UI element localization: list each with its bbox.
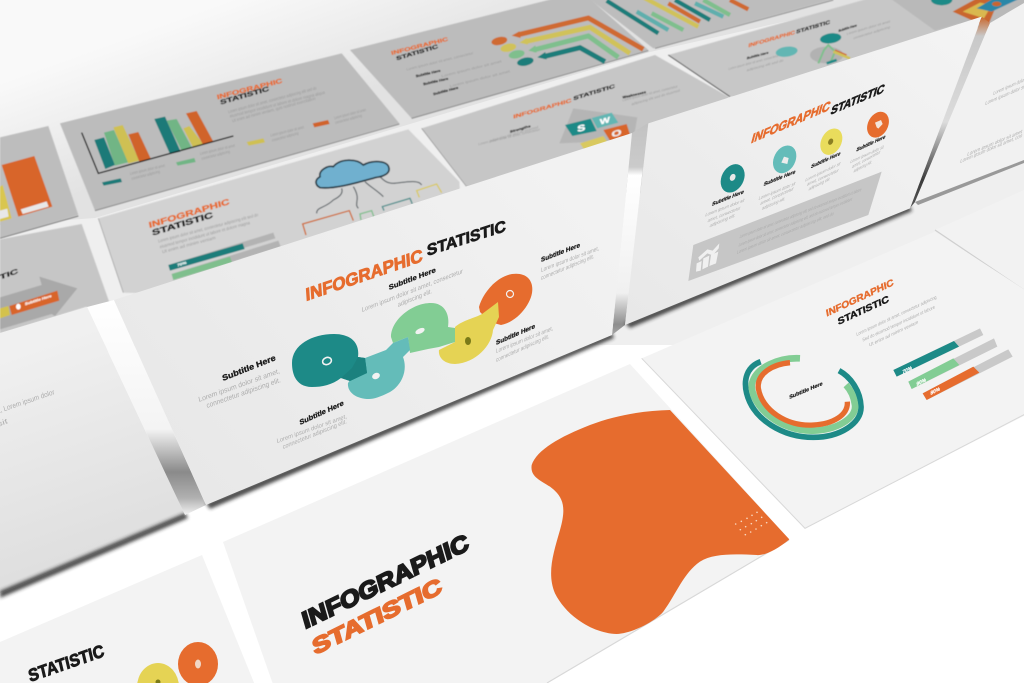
heading: STATISTIC bbox=[573, 83, 616, 103]
bent arrows bbox=[518, 18, 643, 62]
label: bottom: connectetur adipiscing elit. bbox=[282, 418, 347, 451]
icon circles bbox=[775, 32, 842, 58]
panel: arrow slide bbox=[0, 224, 125, 352]
label: left bbox=[198, 354, 281, 410]
column text bbox=[705, 144, 885, 229]
legend: Lorem ipsum dolor sit amet bbox=[130, 163, 166, 176]
heading bbox=[391, 37, 449, 62]
panel: far right flat slide bbox=[935, 190, 1024, 290]
text block: Lorem ipsum dolor sit bbox=[985, 83, 1024, 107]
subtitles: Lorem ipsum dolor sit amet, consectetur bbox=[406, 52, 474, 72]
labels: Weaknesses bbox=[622, 89, 647, 100]
heading bbox=[148, 196, 230, 238]
column text: amet, consectetur bbox=[806, 167, 840, 187]
blob: orange bbox=[479, 274, 532, 325]
icon: growth chart bbox=[696, 243, 719, 272]
column labels: Subtitle Here bbox=[855, 133, 887, 154]
label: bottom: Subtitle Here bbox=[299, 400, 345, 427]
column text: Lorem ipsum dolor sit bbox=[805, 160, 842, 183]
text block bbox=[856, 294, 937, 349]
heading bbox=[825, 276, 894, 327]
panel: cloud slide bbox=[98, 129, 467, 300]
heading bbox=[305, 216, 506, 306]
percent badges bbox=[491, 35, 534, 67]
heading: STATISTIC bbox=[829, 82, 887, 119]
gutter: left and centre bbox=[87, 300, 206, 515]
progress bar: 80%: 80% bbox=[930, 386, 941, 396]
yellow blob bbox=[137, 663, 179, 683]
text block: Ut enim ad minim veniam bbox=[162, 236, 216, 255]
heading: STATISTIC bbox=[796, 19, 831, 35]
swot matrix bbox=[559, 108, 637, 153]
labels bbox=[728, 19, 891, 72]
panel: bar chart slide: eiusmod tempor incididunt ut labore et dolore magna aliqua bbox=[229, 90, 326, 119]
column text: amet, consectetur bbox=[760, 185, 795, 206]
label: left: Subtitle Here bbox=[222, 354, 277, 383]
icon: leaf bbox=[156, 680, 160, 683]
column text: amet, consectetur bbox=[851, 148, 882, 169]
text block bbox=[228, 86, 326, 124]
text block: Sed do eiusmod tempor incididunt ut labore bbox=[862, 305, 935, 343]
column bars bbox=[607, 0, 748, 33]
heading: STATISTIC bbox=[220, 86, 271, 107]
panel: icons and growth slide bbox=[668, 0, 960, 107]
icon: teal circle bbox=[716, 160, 749, 197]
label: left: connectetur adipiscing elit. bbox=[206, 375, 281, 410]
orange blob bbox=[178, 642, 218, 683]
labels: adipiscing elit sed do eiusmod bbox=[490, 125, 539, 143]
heading: INFOGRAPHIC bbox=[748, 30, 796, 49]
subtitles: Subtitle Here bbox=[433, 85, 459, 96]
label: right top: Lorem ipsum dolor sit amet, bbox=[541, 245, 599, 274]
panel: donut slide bbox=[642, 232, 1024, 528]
column text: adipiscing elit. bbox=[808, 175, 831, 192]
labels: Lorem ipsum dolor sit amet bbox=[847, 19, 891, 36]
heading bbox=[299, 530, 472, 660]
blob: light teal bbox=[348, 337, 410, 399]
orange blob bbox=[531, 410, 789, 634]
legend: consectetur adipiscing bbox=[335, 113, 362, 125]
panel: cloud slide: Lorem ipsum dolor sit amet, consectetur adipiscing elit sed do bbox=[158, 212, 259, 244]
column labels bbox=[711, 133, 887, 208]
column text: Lorem ipsum dolor sit bbox=[705, 197, 746, 218]
shadow: right panel bbox=[625, 206, 912, 328]
yellow step bbox=[0, 306, 10, 318]
icons bbox=[322, 290, 514, 380]
heading: INFOGRAPHIC bbox=[391, 37, 449, 57]
label: top: Subtitle Here bbox=[388, 266, 437, 292]
shadow: centre panel bbox=[206, 333, 614, 509]
panel: cloud slide: eiusmod tempor incididunt ut labore et dolore magna bbox=[159, 220, 251, 250]
column text: Lorem ipsum dolor sit bbox=[758, 180, 797, 201]
heading bbox=[750, 82, 887, 147]
flow diagram bbox=[292, 274, 532, 399]
heading: INFOGRAPHIC bbox=[148, 196, 230, 230]
donut label: Subtitle Here bbox=[789, 380, 823, 400]
text block bbox=[960, 76, 1024, 165]
label: top: adipiscing elit. bbox=[398, 288, 432, 309]
subtitles: Lorem ipsum dolor sit amet bbox=[441, 60, 503, 79]
heading: STATISTIC bbox=[837, 293, 890, 327]
shadow: left panel bbox=[0, 513, 188, 598]
label: right top: Subtitle Here bbox=[541, 242, 580, 264]
text block: Lorem ipsum dolor bbox=[993, 76, 1024, 96]
panel: column chart slide bbox=[573, 0, 870, 48]
blob: dark teal bbox=[292, 334, 367, 387]
labels: Lorem ipsum dolor sit amet, consectetur bbox=[478, 128, 540, 147]
heading: INFOGRAPHIC bbox=[216, 78, 283, 101]
bar chart bbox=[82, 111, 233, 173]
panel: main slide right bbox=[625, 17, 982, 325]
labels: Lorem ipsum dolor sit amet, consectetur bbox=[728, 54, 779, 71]
swot matrix: W bbox=[600, 116, 612, 127]
icon: cloud bbox=[316, 160, 389, 188]
gutter: right and far right bbox=[910, 17, 990, 208]
label: right top: connectetur adipiscing elit. bbox=[541, 254, 594, 282]
heading bbox=[513, 83, 616, 121]
heading bbox=[216, 78, 283, 107]
swot matrix: O bbox=[611, 129, 623, 140]
label: bottom bbox=[276, 400, 347, 451]
panel: title slide bbox=[223, 364, 789, 683]
label: left: Lorem ipsum dolor sit amet, bbox=[198, 367, 280, 404]
panel: arrows slide bbox=[350, 0, 648, 118]
column text: amet, consectetur bbox=[707, 205, 742, 223]
label: top: Lorem ipsum dolor sit amet, consectetur bbox=[362, 267, 463, 313]
heading: INFOGRAPHIC bbox=[305, 246, 423, 306]
legend: consectetur adipiscing bbox=[272, 131, 299, 143]
gray band bbox=[688, 172, 882, 281]
column labels: Subtitle Here bbox=[763, 168, 797, 188]
heading: STATISTIC bbox=[396, 43, 440, 62]
labels bbox=[478, 84, 681, 147]
panel: far right slide bbox=[915, 3, 1024, 205]
progress bar: 90%: 90% bbox=[916, 377, 927, 387]
progress bars: 70% bbox=[177, 259, 188, 268]
column text: adipiscing elit. bbox=[709, 212, 736, 229]
card: orange bbox=[2, 156, 52, 217]
shadow: far right bbox=[915, 160, 1024, 205]
panel: swot slide bbox=[422, 55, 740, 203]
progress bar: 80% bbox=[923, 349, 1013, 400]
progress bars bbox=[168, 233, 281, 280]
heading: INFOGRAPHIC bbox=[513, 98, 572, 121]
heading bbox=[748, 19, 831, 49]
labels: Subtitle Here bbox=[838, 23, 858, 33]
column labels: Subtitle Here bbox=[810, 150, 842, 171]
icon: step badge bbox=[16, 304, 21, 310]
heading: STATISTIC bbox=[151, 209, 215, 238]
legend: consectetur adipiscing bbox=[131, 169, 160, 181]
label: top bbox=[362, 266, 463, 313]
subtitles: Lorem ipsum dolor sit amet bbox=[449, 70, 511, 89]
labels: consectetur adipiscing bbox=[853, 25, 890, 40]
labels: adipiscing elit sed do bbox=[747, 59, 784, 72]
blob: green bbox=[391, 303, 455, 353]
heading: STATISTIC bbox=[309, 573, 444, 660]
dot pattern bbox=[735, 512, 767, 535]
panel: bar chart slide: Ut enim ad minim veniam, quis nostrud exercitation bbox=[232, 96, 316, 124]
progress bar: 90% bbox=[908, 338, 997, 389]
swot matrix: S bbox=[577, 123, 585, 135]
panel: top right map slide bbox=[867, 0, 1024, 32]
progress bar: 70% bbox=[893, 328, 983, 377]
legend: Lorem ipsum dolor sit amet bbox=[270, 125, 305, 138]
legend bbox=[102, 108, 366, 186]
gray band: Lorem ipsum dolor sit amet, consectetur adipiscing elit, sed do bbox=[736, 211, 835, 255]
cloud connectors bbox=[317, 177, 422, 213]
panel: main slide centre bbox=[114, 133, 632, 505]
panel: bar chart slide bbox=[60, 53, 399, 211]
step label: Subtitle Here bbox=[25, 294, 52, 306]
icon: light teal circle bbox=[768, 141, 801, 177]
progress bar: 70%: 70% bbox=[902, 365, 913, 375]
blob: yellow bbox=[439, 302, 499, 364]
text block: Ut enim ad minim veniam bbox=[869, 320, 919, 349]
label: right bottom: Lorem ipsum dolor sit amet, bbox=[496, 326, 553, 355]
column labels: Subtitle Here bbox=[711, 188, 745, 208]
legend: consectetur adipiscing bbox=[201, 149, 230, 161]
subtitles bbox=[406, 52, 511, 96]
subtitles: Subtitle Here bbox=[423, 76, 449, 86]
heading: INFOGRAPHIC bbox=[750, 98, 833, 147]
legend: Lorem ipsum dolor sit amet bbox=[200, 143, 236, 156]
icon: orange circle bbox=[863, 108, 893, 141]
labels: Strengths bbox=[510, 123, 531, 134]
icon: pin bbox=[195, 660, 201, 668]
orange step bbox=[9, 291, 59, 315]
big arrow bbox=[0, 277, 77, 329]
heading: INFOGRAPHIC bbox=[299, 530, 472, 634]
panel: bottom left slide bbox=[0, 555, 257, 683]
column text: Lorem ipsum dolor sit bbox=[850, 144, 885, 164]
subtitles: Subtitle Here bbox=[415, 68, 441, 78]
column text: adipiscing elit. bbox=[761, 195, 786, 211]
heading: STATISTIC bbox=[427, 216, 506, 260]
panel: bar chart slide: Lorem ipsum dolor sit amet, consectetur adipiscing elit sed do bbox=[228, 86, 317, 115]
connected boxes bbox=[303, 184, 442, 235]
panel: top left card slide bbox=[0, 126, 78, 238]
gutter: centre and right bbox=[612, 123, 648, 335]
column text: adipiscing elit. bbox=[853, 158, 873, 174]
labels: adipiscing elit sed do eiusmod bbox=[631, 88, 681, 106]
labels: Lorem ipsum dolor sit amet, consectetur bbox=[622, 84, 678, 102]
labels: Subtitle Here bbox=[747, 50, 769, 61]
label: right bottom: connectetur adipiscing elit. bbox=[496, 334, 549, 364]
donut chart bbox=[745, 358, 861, 437]
growth arrow bbox=[810, 45, 850, 63]
label: right bottom: Subtitle Here bbox=[496, 323, 535, 347]
legend: Lorem ipsum dolor sit amet bbox=[334, 108, 366, 120]
panel: main slide left bbox=[0, 307, 185, 593]
text block bbox=[158, 212, 259, 255]
heading: INFOGRAPHIC bbox=[825, 276, 894, 319]
icon: yellow circle bbox=[816, 125, 847, 159]
label: bottom: Lorem ipsum dolor sit amet, bbox=[276, 414, 347, 445]
